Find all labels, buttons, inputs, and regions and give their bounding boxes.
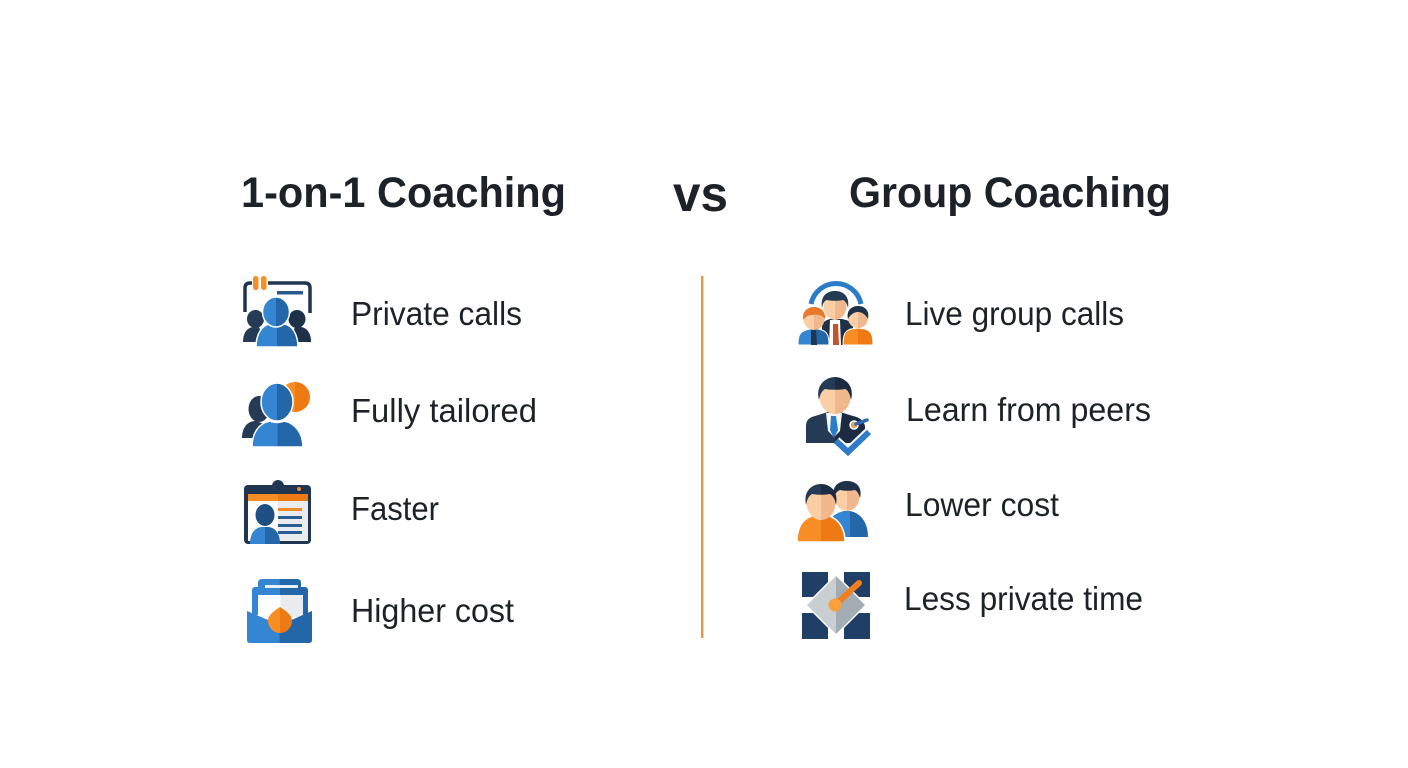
label: Live group calls: Live group calls bbox=[905, 295, 1124, 332]
icon: live group calls bbox=[798, 284, 873, 345]
label: Less private time: Less private time bbox=[904, 580, 1143, 617]
heading: 1-on-1 Coaching: 1-on-1 Coaching bbox=[241, 169, 566, 217]
label: Fully tailored: Fully tailored bbox=[351, 392, 537, 429]
icon: private calls bbox=[243, 276, 311, 347]
icon: learn from peers bbox=[806, 377, 869, 452]
icon: higher cost envelope bbox=[247, 579, 312, 643]
panel: group coaching list bbox=[797, 284, 1151, 639]
label: Learn from peers: Learn from peers bbox=[906, 391, 1151, 428]
label: Higher cost: Higher cost bbox=[351, 592, 514, 629]
label: Faster: Faster bbox=[351, 490, 439, 527]
heading: vs: vs bbox=[673, 166, 728, 222]
heading: Group Coaching: Group Coaching bbox=[849, 169, 1171, 217]
label: Private calls: Private calls bbox=[351, 295, 522, 332]
icon: faster profile card bbox=[244, 480, 311, 544]
panel: 1-on-1 coaching list bbox=[242, 276, 537, 643]
icon: less private time bbox=[802, 572, 870, 639]
icon: lower cost bbox=[797, 481, 868, 542]
center divider line bbox=[701, 276, 703, 638]
label: Lower cost: Lower cost bbox=[905, 486, 1059, 523]
icon: fully tailored bbox=[242, 382, 310, 447]
